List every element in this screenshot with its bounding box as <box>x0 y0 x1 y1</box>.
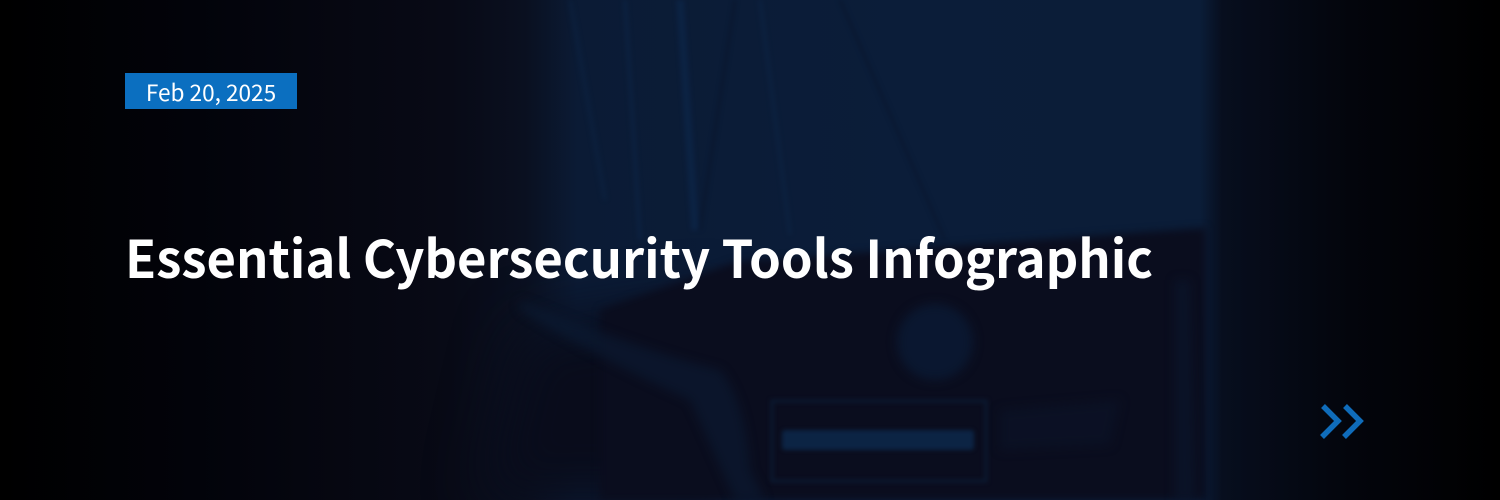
light streaks <box>625 0 640 240</box>
date badge <box>125 73 297 109</box>
globe on screen <box>897 304 973 380</box>
icon: double chevron arrow <box>1320 404 1364 439</box>
shoulder <box>520 300 765 500</box>
system hacked box <box>772 401 986 481</box>
date badge: Feb 20, 2025 <box>146 75 276 108</box>
lower dark zone: desk fade <box>480 300 720 500</box>
lower dark zone: monitor <box>600 228 1206 500</box>
